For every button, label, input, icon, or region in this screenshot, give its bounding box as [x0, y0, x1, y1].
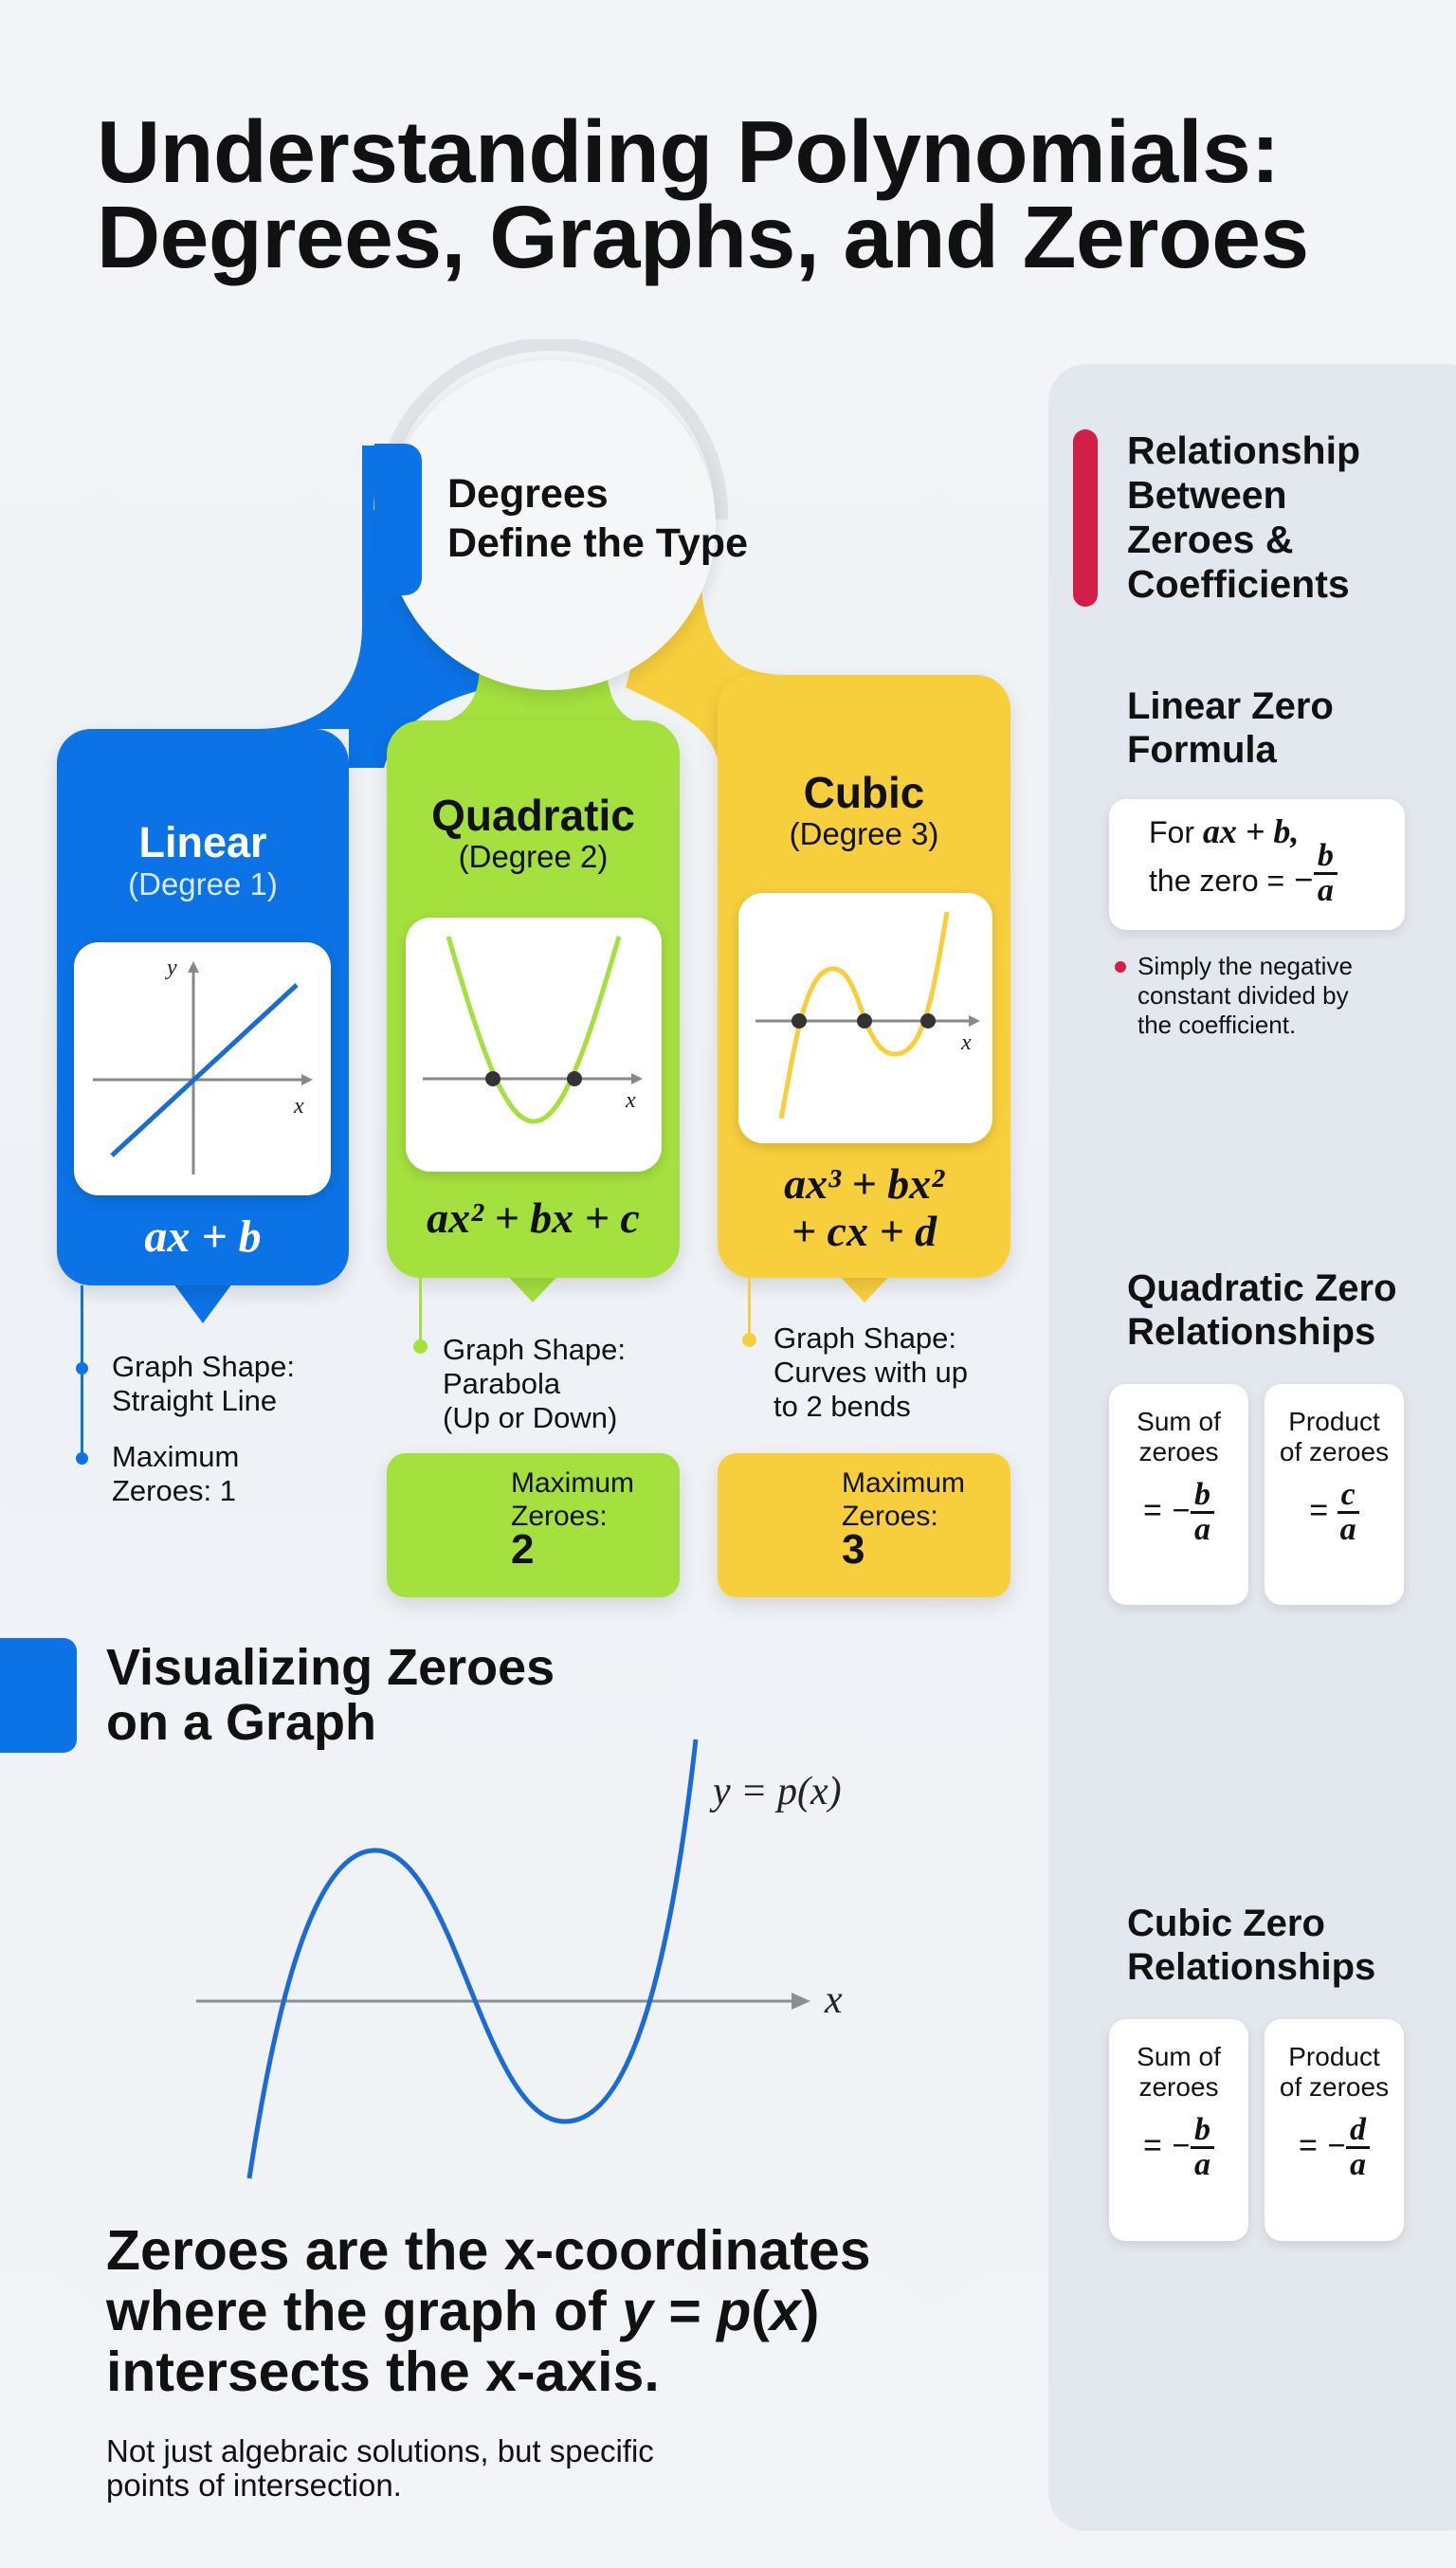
quadratic details: (Up or Down): [443, 1401, 617, 1434]
quadratic details: Graph Shape:: [443, 1333, 626, 1366]
quadratic product box: c: [1341, 1477, 1356, 1512]
card: linear: [57, 729, 349, 1285]
sub note: Not just algebraic solutions, but specific: [106, 2433, 654, 2468]
quadratic sum box: Sum of: [1137, 1407, 1221, 1436]
linear zero heading: [1127, 685, 1334, 771]
quadratic max zeroes: Zeroes:: [511, 1501, 608, 1532]
cubic max zeroes: Maximum: [842, 1467, 965, 1499]
panel heading: [1127, 428, 1360, 606]
quadratic product box: a: [1340, 1512, 1356, 1547]
panel heading: Between: [1127, 473, 1287, 517]
quadratic sum box: a: [1194, 1512, 1210, 1547]
linear graph: x: [293, 1094, 304, 1119]
linear formula box: For ax + b,: [1149, 812, 1299, 850]
card: linear: Linear: [138, 818, 267, 866]
connectors from hub to cards: [174, 446, 887, 1323]
linear graph: y: [165, 956, 177, 980]
card: quadratic: (Degree 2): [459, 839, 608, 874]
cubic product box: of zeroes: [1280, 2072, 1389, 2102]
cubic sum box: Sum of: [1137, 2042, 1221, 2071]
quadratic zero heading: Relationships: [1127, 1311, 1375, 1353]
linear details: Straight Line: [112, 1384, 277, 1417]
cubic formula: ax³ + bx²: [784, 1159, 944, 1208]
panel heading: Relationship: [1127, 428, 1360, 472]
linear zero heading: Formula: [1127, 729, 1277, 771]
quadratic product box: of zeroes: [1280, 1437, 1389, 1466]
cubic sum box: b: [1194, 2112, 1210, 2147]
card: cubic: (Degree 3): [790, 816, 938, 851]
linear formula: ax + b: [144, 1211, 262, 1262]
quadratic sum box: [1109, 1384, 1248, 1605]
cubic product box: a: [1350, 2147, 1366, 2182]
cubic sum box: [1109, 2019, 1248, 2241]
cubic sum box: zeroes: [1138, 2072, 1219, 2102]
text: Zeroes: 1: [112, 1474, 236, 1507]
panel: relationship between zeroes & coefficients: [1048, 364, 1456, 2531]
linear formula box: a: [1318, 873, 1334, 908]
key statement: [106, 2219, 871, 2403]
sub note: points of intersection.: [106, 2468, 402, 2503]
card: linear: (Degree 1): [128, 866, 278, 902]
graph of y = p(x): [196, 1739, 843, 2178]
quadratic product box: Product: [1288, 1407, 1380, 1436]
quadratic zero heading: [1127, 1267, 1397, 1353]
quadratic product box: [1265, 1384, 1404, 1605]
linear details: Maximum: [112, 1440, 239, 1473]
cubic formula: + cx + d: [792, 1207, 937, 1255]
quadratic details: Parabola: [443, 1367, 560, 1400]
quadratic zero heading: Quadratic Zero: [1127, 1267, 1397, 1309]
panel heading: Coefficients: [1127, 562, 1350, 606]
quadratic sum box: = −: [1143, 1492, 1191, 1528]
cubic graph: [738, 893, 992, 1143]
quadratic details: [413, 1278, 626, 1434]
cubic max zeroes: 3: [842, 1526, 864, 1573]
blue tab: [374, 444, 422, 595]
linear zero heading: Linear Zero: [1127, 685, 1334, 727]
quadratic graph: x: [625, 1088, 636, 1113]
card: quadratic: [387, 720, 680, 1278]
card: quadratic: Quadratic: [431, 791, 635, 840]
key statement: where the graph of y = p(x): [106, 2280, 819, 2342]
pointers: [171, 1280, 235, 1323]
quadratic sum box: b: [1194, 1477, 1210, 1512]
cubic sum box: = −: [1143, 2127, 1191, 2163]
cubic details: [742, 1278, 968, 1423]
hub circle: degrees define the type: [373, 339, 748, 700]
linear graph: [74, 942, 331, 1195]
quadratic product box: =: [1309, 1492, 1328, 1528]
linear formula box: [1109, 799, 1405, 930]
graph of y = p(x): y = p(x): [709, 1770, 842, 1813]
title: Degrees, Graphs, and Zeroes: [97, 188, 1309, 286]
card: cubic: [718, 675, 1010, 1278]
quadratic max zeroes: [387, 1453, 680, 1597]
hub text: Degrees: [447, 471, 609, 517]
hub text: [447, 471, 748, 566]
cubic sum box: a: [1194, 2147, 1210, 2182]
cubic product box: d: [1350, 2112, 1366, 2147]
linear details: [76, 1285, 295, 1507]
linear details: Graph Shape:: [112, 1350, 295, 1383]
key statement: Zeroes are the x-coordinates: [106, 2219, 871, 2282]
cubic product box: = −: [1299, 2127, 1346, 2163]
title: [97, 102, 1309, 286]
cubic details: Curves with up: [774, 1356, 968, 1389]
quadratic max zeroes: 2: [511, 1526, 534, 1573]
quadratic graph: [406, 918, 662, 1172]
cubic max zeroes: [718, 1453, 1010, 1597]
cubic product box: [1265, 2019, 1404, 2241]
cubic zero heading: Relationships: [1127, 1946, 1375, 1988]
cubic product box: Product: [1288, 2042, 1380, 2071]
red accent bar: [1073, 429, 1098, 607]
cubic details: Graph Shape:: [774, 1321, 956, 1355]
sub note: [106, 2433, 654, 2503]
graph of y = p(x): x: [824, 1978, 843, 2022]
quadratic max zeroes: Maximum: [511, 1467, 634, 1499]
cubic details: to 2 bends: [774, 1390, 911, 1423]
visualizing heading: [106, 1639, 555, 1751]
linear formula box: the zero = −: [1149, 861, 1314, 899]
card: cubic: Cubic: [804, 768, 924, 817]
bullet note: Simply the negative constant divided by the coefficient.: [1138, 952, 1353, 1039]
key statement: intersects the x-axis.: [106, 2340, 660, 2403]
cubic max zeroes: Zeroes:: [842, 1501, 938, 1532]
cubic formula: [784, 1159, 945, 1255]
quadratic formula: ax² + bx + c: [427, 1193, 640, 1242]
hub text: Define the Type: [447, 520, 748, 566]
cubic graph: x: [960, 1030, 972, 1055]
cubic zero heading: Cubic Zero: [1127, 1903, 1325, 1944]
visualizing heading: on a Graph: [106, 1694, 376, 1751]
visualizing section marker: [0, 1638, 77, 1753]
cubic zero heading: [1127, 1903, 1375, 1988]
title: Understanding Polynomials:: [97, 102, 1280, 201]
visualizing heading: Visualizing Zeroes: [106, 1639, 555, 1696]
panel heading: Zeroes &: [1127, 518, 1293, 561]
quadratic sum box: zeroes: [1138, 1437, 1219, 1466]
linear formula box: b: [1318, 838, 1334, 873]
